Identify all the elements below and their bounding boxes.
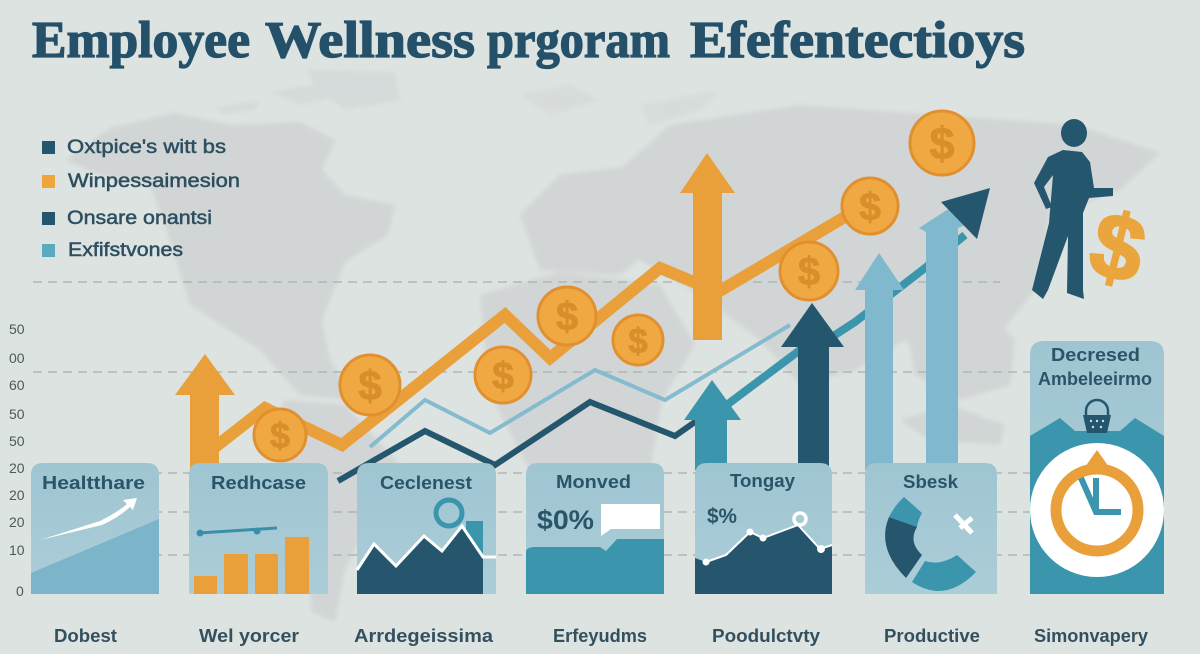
icon: dollar sign: $ — [1081, 192, 1155, 304]
panel: area chart: Ceclenest — [380, 473, 472, 493]
coins: $ — [358, 362, 382, 409]
panel: monved: $0% — [537, 505, 594, 535]
title: Wellness — [265, 12, 475, 69]
panel: tongay — [695, 463, 832, 594]
panel: sbesk donut: Sbesk — [903, 472, 959, 492]
bottom category labels: Productive — [884, 626, 980, 646]
y axis labels: 50 — [9, 321, 25, 337]
y axis labels: 20 — [9, 487, 25, 503]
title: prgoram — [487, 12, 670, 69]
coins: $ — [628, 322, 648, 361]
y axis labels: 50 — [9, 406, 25, 422]
y axis labels: 50 — [9, 433, 25, 449]
arrow: light blue — [855, 253, 904, 470]
coins: $ — [859, 186, 881, 229]
bottom category labels: Wel yorcer — [199, 626, 299, 646]
arrowhead: dark triangle — [941, 188, 990, 239]
legend: Onsare onantsi — [67, 208, 212, 229]
bottom category labels: Dobest — [54, 626, 117, 646]
arrow: light blue tall — [919, 208, 965, 470]
coins: $ — [929, 118, 955, 169]
panel: decreased absenteeism: Decresed — [1051, 345, 1140, 365]
legend: Oxtpice's witt bs — [67, 137, 226, 158]
panel: reduced bars — [189, 463, 328, 594]
panel: sbesk donut — [865, 463, 997, 594]
legend: Exfifstvones — [68, 240, 183, 261]
coins: $ — [492, 355, 514, 398]
panel: monved: Monved — [556, 472, 631, 492]
line: dark trend — [338, 402, 712, 481]
arrow: teal — [684, 380, 741, 470]
panel: tongay: $% — [707, 505, 737, 528]
y axis labels: 20 — [9, 514, 25, 530]
title: Employee — [32, 12, 250, 69]
legend: Winpessaimesion — [68, 171, 240, 192]
line: light blue trend — [370, 325, 790, 447]
dashed grid lines — [33, 282, 1030, 555]
y axis labels — [9, 321, 25, 599]
background world map — [66, 70, 1160, 622]
panel: reduced bars: Redhcase — [211, 473, 306, 493]
coins: $ — [798, 250, 820, 294]
panel: decreased absenteeism — [1030, 341, 1164, 594]
title: Efefentectioys — [690, 12, 1025, 69]
y axis labels: 0 — [16, 583, 24, 599]
arrow: orange short — [175, 354, 235, 470]
panel: healthcare: Healtthare — [42, 473, 145, 493]
panel: decreased absenteeism: Ambeleeirmo — [1038, 369, 1152, 389]
y axis labels: 00 — [9, 350, 25, 366]
icon: person — [1032, 119, 1113, 299]
panel: healthcare — [31, 463, 159, 594]
y axis labels: 60 — [9, 377, 25, 393]
coins: $ — [556, 295, 578, 339]
title — [32, 12, 1025, 69]
panel: monved — [526, 463, 664, 594]
bottom category labels — [54, 626, 1148, 646]
arrow: orange tall — [680, 153, 735, 340]
coins — [254, 111, 974, 461]
line: orange trend — [205, 205, 865, 455]
panel: area chart — [357, 463, 496, 594]
legend — [42, 137, 240, 261]
panel: tongay: Tongay — [730, 471, 795, 491]
arrow: dark — [781, 303, 844, 470]
y axis labels: 10 — [9, 542, 25, 558]
coins: $ — [270, 415, 290, 456]
bottom category labels: Arrdegeissima — [354, 626, 494, 646]
bottom category labels: Simonvapery — [1034, 626, 1148, 646]
y axis labels: 20 — [9, 460, 25, 476]
bottom category labels: Poodulctvty — [712, 626, 820, 646]
line: teal trend — [700, 235, 965, 425]
bottom category labels: Erfeyudms — [553, 626, 647, 646]
